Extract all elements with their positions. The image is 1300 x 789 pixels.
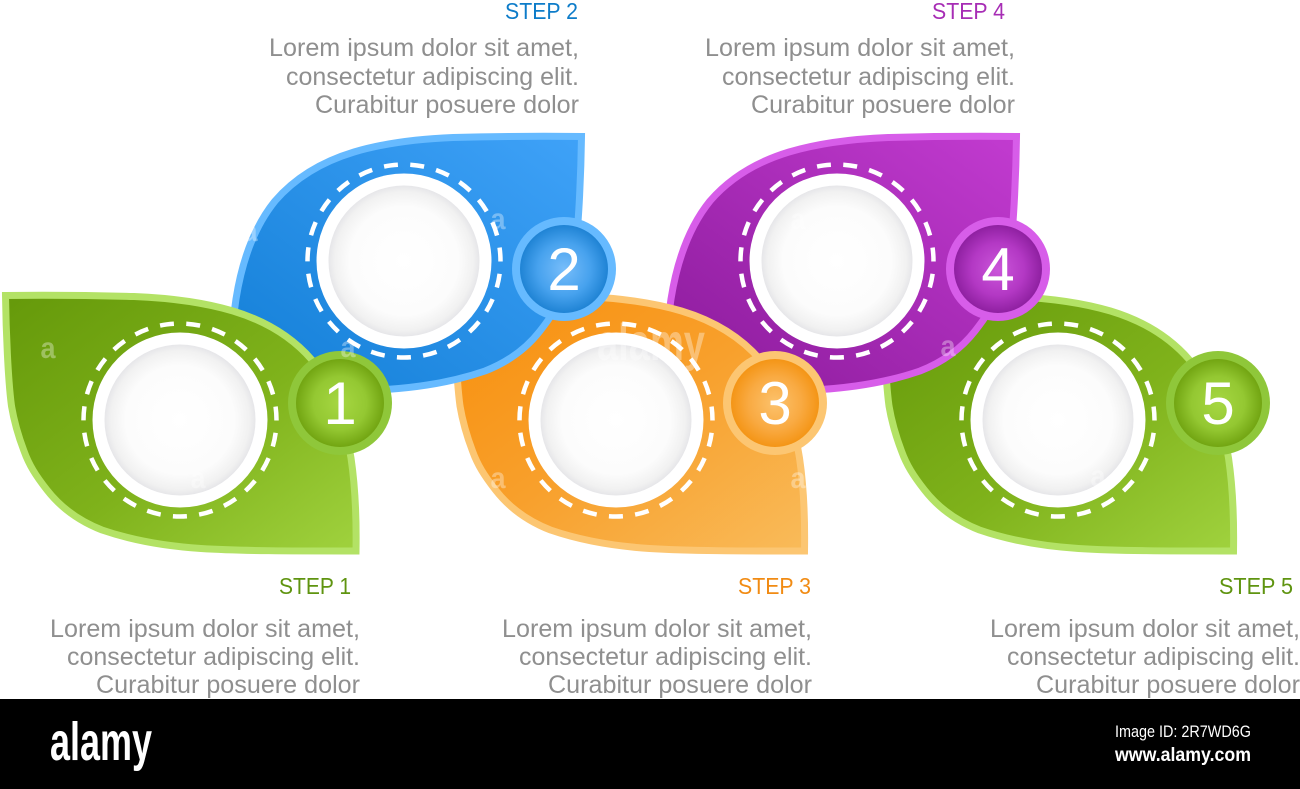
step 3 text: consectetur adipiscing elit. bbox=[519, 643, 812, 671]
step 1 text: Curabitur posuere dolor bbox=[96, 671, 360, 699]
step 5 text: Curabitur posuere dolor bbox=[1036, 671, 1300, 699]
step 3 text: STEP 3 bbox=[738, 573, 811, 599]
watermark marks: a bbox=[490, 462, 506, 495]
step 3 text: Lorem ipsum dolor sit amet, bbox=[502, 615, 812, 643]
leaf panel: step 3 bbox=[454, 295, 805, 551]
number badge 4: 4 bbox=[981, 236, 1015, 303]
step 4 text: Lorem ipsum dolor sit amet, bbox=[705, 34, 1015, 62]
picture circle: step 5 bbox=[970, 332, 1146, 508]
step 5 text: STEP 5 bbox=[1219, 573, 1293, 599]
picture circle: step 3 bbox=[528, 332, 704, 508]
watermark marks: a bbox=[790, 462, 806, 495]
number badge 2 bbox=[512, 217, 616, 321]
watermark marks: alamy bbox=[597, 314, 705, 372]
picture circle: step 1 bbox=[92, 332, 268, 508]
number badge 5: 5 bbox=[1201, 370, 1235, 437]
leaf panel: step 4 bbox=[666, 136, 1016, 392]
step 2 text: Curabitur posuere dolor bbox=[315, 91, 579, 119]
number badge 4 bbox=[946, 217, 1050, 321]
watermark marks: a bbox=[1090, 460, 1106, 493]
picture circle: step 4 bbox=[750, 174, 924, 348]
number badge 3: 3 bbox=[758, 370, 792, 437]
leaf panel: step 5 bbox=[883, 295, 1234, 551]
watermark marks: a bbox=[242, 215, 258, 248]
step 4 text: consectetur adipiscing elit. bbox=[722, 63, 1015, 91]
leaf panel: step 1 bbox=[6, 295, 356, 551]
step 4 graphic bbox=[666, 136, 1050, 392]
step 2 text: Lorem ipsum dolor sit amet, bbox=[269, 34, 579, 62]
footer bar bbox=[0, 699, 1300, 789]
step 1 text: Lorem ipsum dolor sit amet, bbox=[50, 615, 360, 643]
step 3 text bbox=[502, 573, 812, 699]
watermark marks: a bbox=[790, 203, 806, 236]
number badge 1: 1 bbox=[323, 370, 357, 437]
step 2 text: consectetur adipiscing elit. bbox=[286, 63, 579, 91]
footer url: www.alamy.com bbox=[1114, 745, 1251, 766]
leaf panel: step 2 bbox=[231, 136, 582, 392]
picture circle: step 2 bbox=[316, 174, 492, 348]
step 4 text: Curabitur posuere dolor bbox=[751, 91, 1015, 119]
step 1 graphic bbox=[6, 295, 392, 551]
footer logo: alamy bbox=[50, 712, 152, 772]
watermark marks: a bbox=[190, 462, 206, 495]
watermark marks: a bbox=[940, 330, 956, 363]
step 5 graphic bbox=[883, 295, 1270, 551]
step 2 text bbox=[269, 0, 579, 119]
watermark marks: a bbox=[40, 332, 56, 365]
step 5 text: consectetur adipiscing elit. bbox=[1007, 643, 1300, 671]
watermark marks bbox=[40, 203, 1106, 495]
number badge 2: 2 bbox=[547, 236, 581, 303]
step 1 text: STEP 1 bbox=[279, 573, 351, 599]
step 2 graphic bbox=[231, 136, 616, 392]
step 4 text bbox=[705, 0, 1015, 119]
watermark marks: a bbox=[490, 203, 506, 236]
number badge 1 bbox=[288, 351, 392, 455]
step 1 text bbox=[50, 573, 360, 699]
step 5 text: Lorem ipsum dolor sit amet, bbox=[990, 615, 1300, 643]
image id: Image ID: 2R7WD6G bbox=[1115, 722, 1251, 741]
step 3 text: Curabitur posuere dolor bbox=[548, 671, 812, 699]
step 3 graphic bbox=[454, 295, 827, 551]
step 5 text bbox=[990, 573, 1300, 699]
number badge 3 bbox=[723, 351, 827, 455]
number badge 5 bbox=[1166, 351, 1270, 455]
step 1 text: consectetur adipiscing elit. bbox=[67, 643, 360, 671]
watermark marks: a bbox=[340, 331, 356, 364]
